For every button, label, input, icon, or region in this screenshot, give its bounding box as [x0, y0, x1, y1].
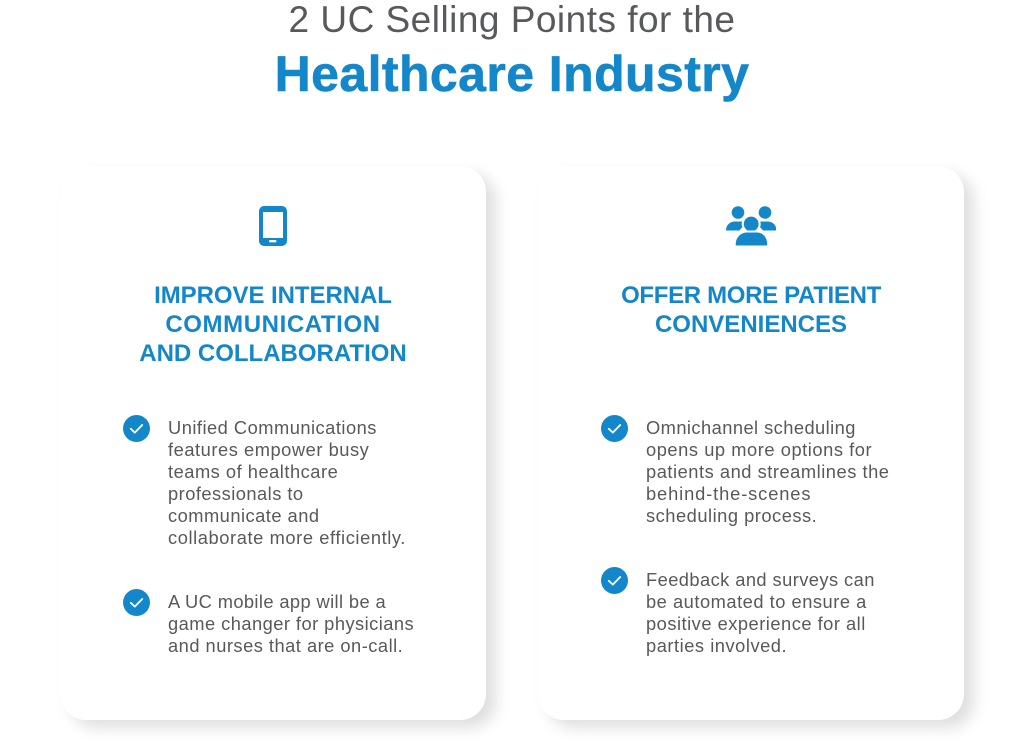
panel: patient conveniences: [538, 166, 964, 720]
text: and nurses that are on-call.: [168, 635, 403, 656]
text: behind-the-scenes: [646, 483, 811, 504]
heading: [621, 282, 882, 338]
text: [168, 417, 406, 548]
title: [275, 0, 750, 102]
text: scheduling process.: [646, 505, 817, 526]
text: communicate and: [168, 505, 320, 526]
text: positive experience for all: [646, 613, 866, 634]
check item 2: [123, 589, 414, 656]
heading: OFFER MORE PATIENT: [621, 282, 881, 309]
text: Unified Communications: [168, 417, 377, 438]
text: [646, 569, 875, 656]
heading: IMPROVE INTERNAL: [154, 282, 392, 309]
heading: [139, 282, 407, 367]
check item 1: [601, 415, 890, 526]
panel: internal communication: [60, 166, 486, 720]
text: A UC mobile app will be a: [168, 591, 386, 612]
heading: COMMUNICATION: [165, 311, 381, 338]
icon: check: [601, 567, 628, 594]
text: patients and streamlines the: [646, 461, 890, 482]
text: opens up more options for: [646, 439, 872, 460]
check item 2: [601, 567, 875, 656]
title line 1: 2 UC Selling Points for the: [289, 0, 735, 40]
heading: AND COLLABORATION: [139, 340, 407, 367]
icon: check: [123, 415, 150, 442]
heading: CONVENIENCES: [655, 311, 847, 338]
text: parties involved.: [646, 635, 787, 656]
icon: check: [601, 415, 628, 442]
text: be automated to ensure a: [646, 591, 867, 612]
text: [168, 591, 414, 656]
icon: mobile phone: [259, 206, 287, 246]
text: professionals to: [168, 483, 304, 504]
check item 1: [123, 415, 406, 548]
text: Omnichannel scheduling: [646, 417, 856, 438]
text: collaborate more efficiently.: [168, 527, 406, 548]
text: teams of healthcare: [168, 461, 338, 482]
title line 2: Healthcare Industry: [275, 46, 749, 102]
icon: people group: [726, 206, 776, 246]
text: game changer for physicians: [168, 613, 414, 634]
text: [646, 417, 890, 526]
text: Feedback and surveys can: [646, 569, 875, 590]
icon: check: [123, 589, 150, 616]
text: features empower busy: [168, 439, 369, 460]
